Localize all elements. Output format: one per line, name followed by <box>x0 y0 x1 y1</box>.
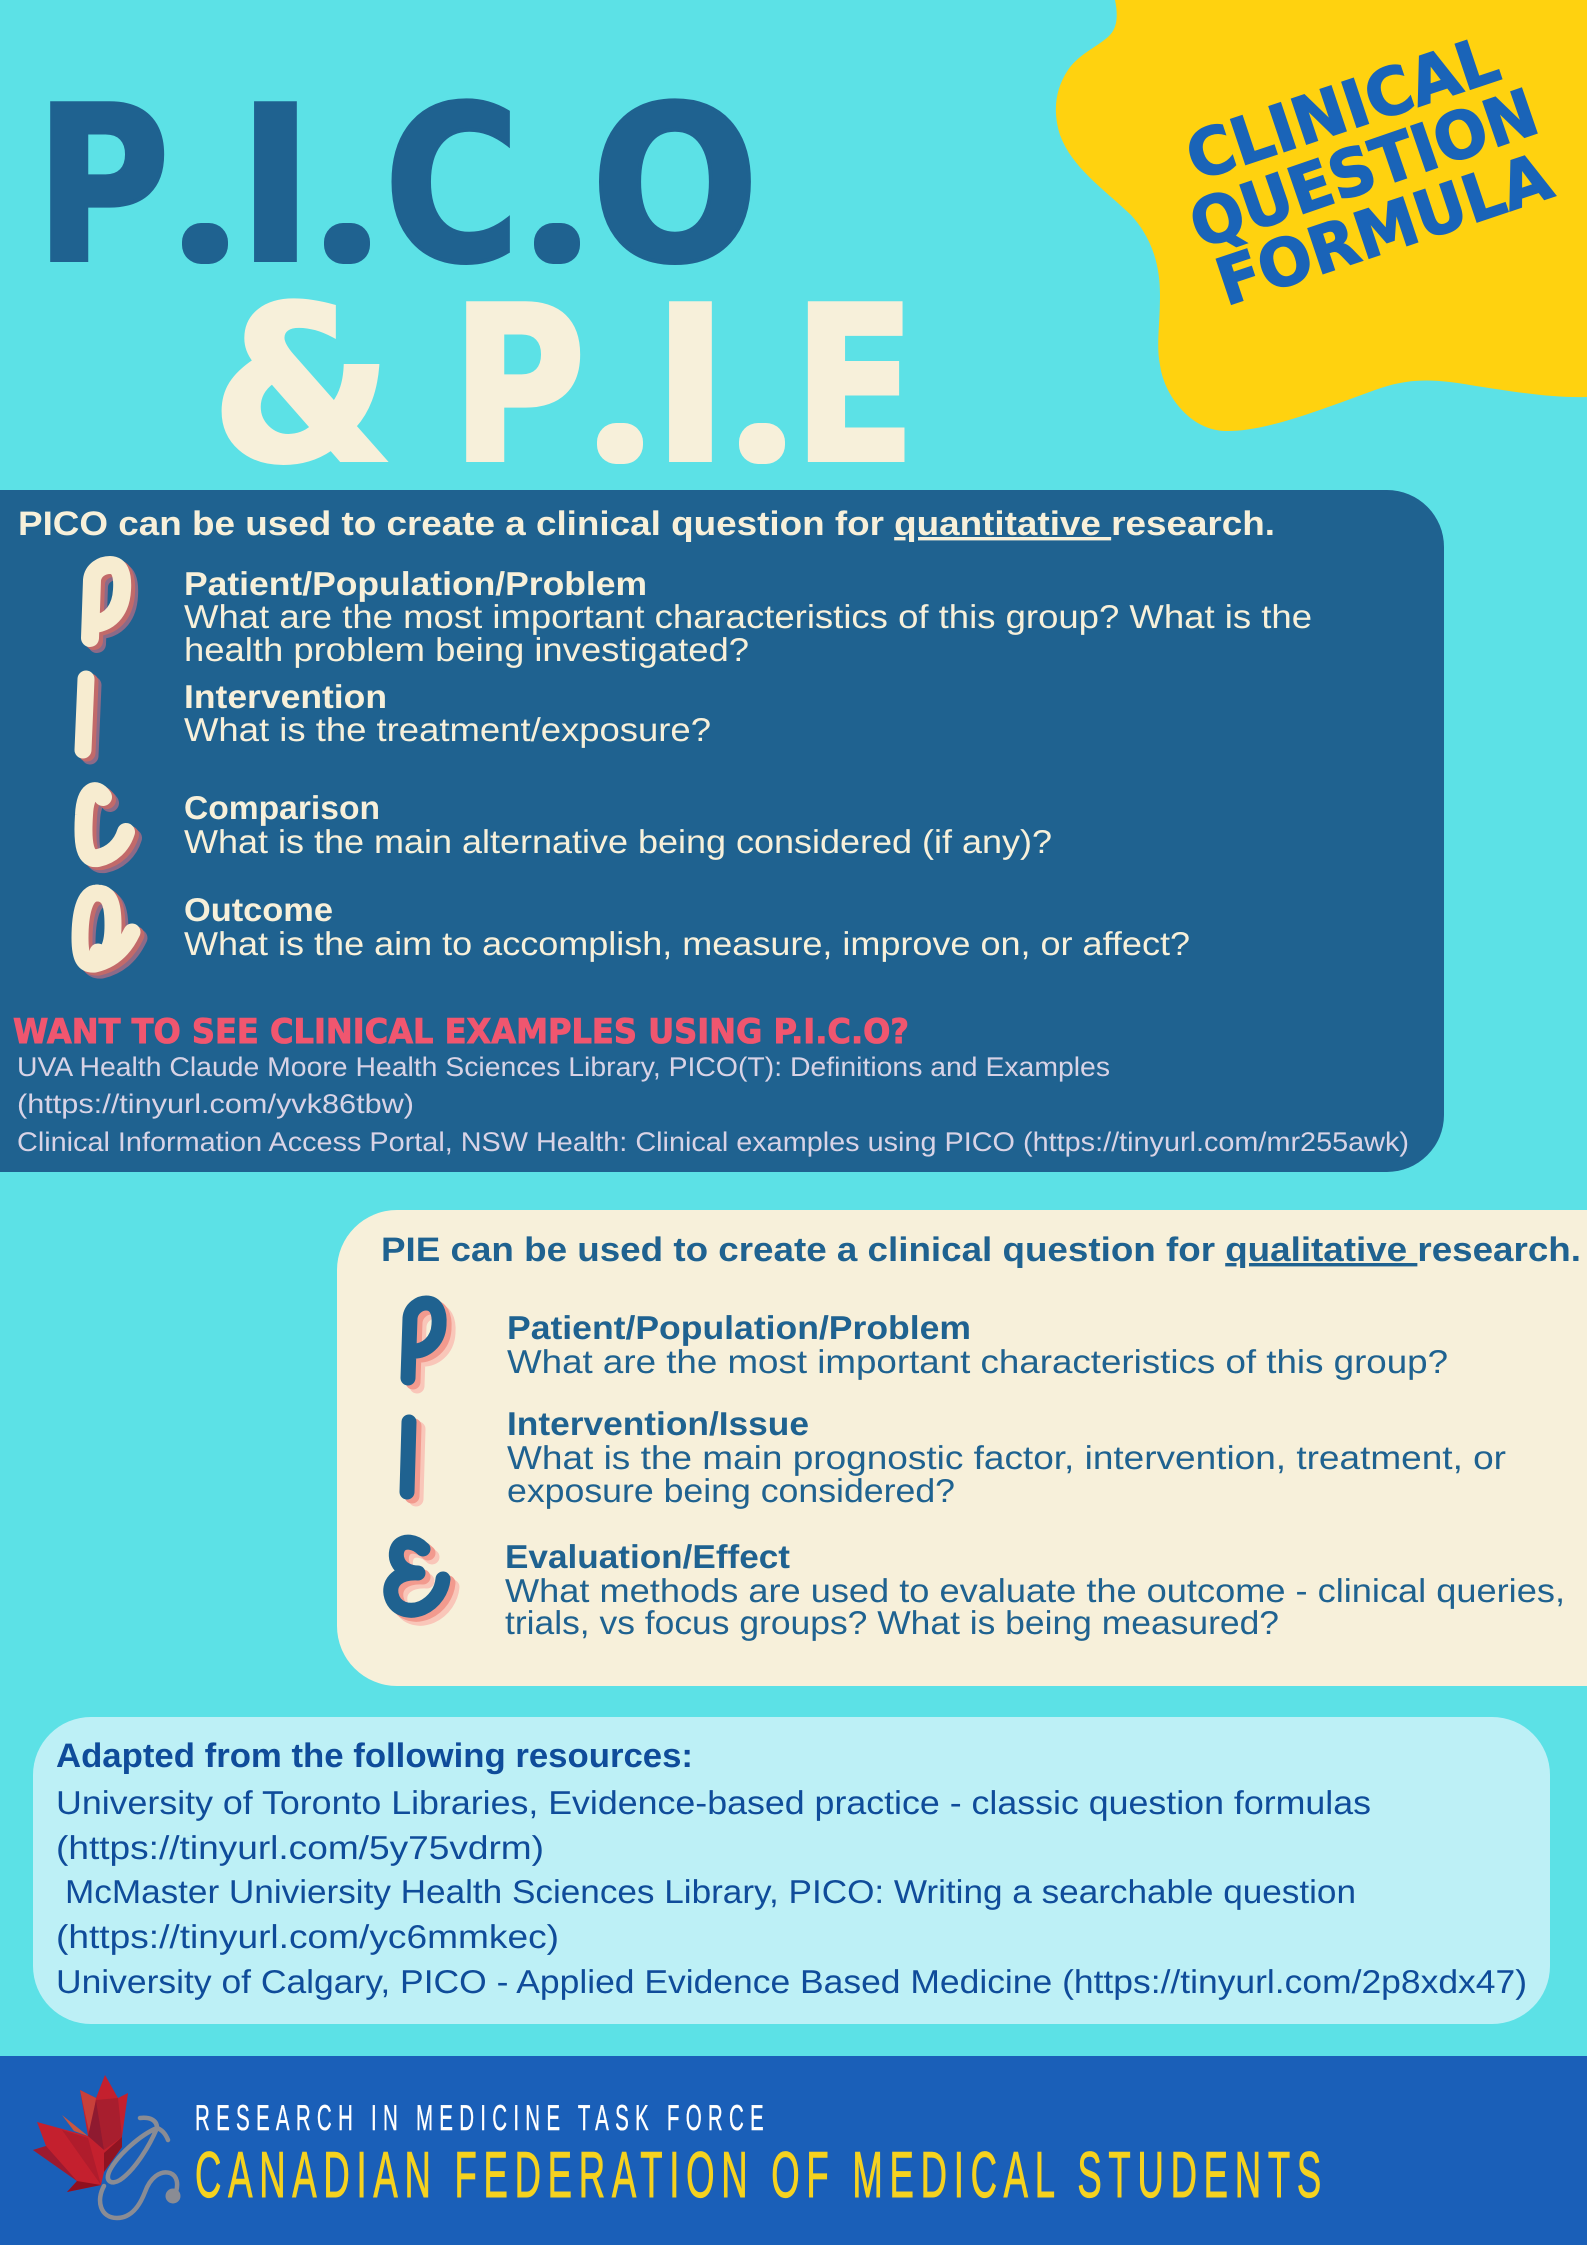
panel: resources <box>33 1717 1550 2024</box>
resources list: University of Calgary, PICO - Applied Evidence Based Medicine (https://tinyurl.com/2p8xdx47) <box>56 1963 1527 2000</box>
PICO panel background <box>0 490 1444 1172</box>
title: & P.I.E <box>211 260 916 511</box>
icon: stethoscope <box>100 2118 180 2218</box>
icon: letter O <box>80 893 139 970</box>
resources panel background <box>33 1717 1550 2024</box>
PIE heading: PIE can be used to create a clinical question for qualitative research. <box>381 1231 1581 1269</box>
title: P.I.C.O: C <box>384 60 520 311</box>
PIE item: intervention: Intervention/Issue <box>507 1405 809 1442</box>
title: P.I.C.O: P <box>35 60 170 311</box>
icon: letter C <box>83 791 133 864</box>
PIE panel background <box>337 1210 1587 1686</box>
title: & P.I.E: & <box>211 260 393 511</box>
resources list: (https://tinyurl.com/yc6mmkec) <box>56 1918 559 1955</box>
resources list: (https://tinyurl.com/5y75vdrm) <box>56 1829 544 1866</box>
icon: letter P <box>408 1303 448 1386</box>
badge text: CLINICAL <box>1177 22 1508 196</box>
title: P.I.C.O: I <box>237 60 314 311</box>
example links: UVA Health Claude Moore Health Sciences Library, PICO(T): Definitions and Examples <box>17 1052 1110 1082</box>
badge: clinical question formula <box>1056 0 1587 431</box>
PICO item: comparison: Comparison <box>184 789 380 826</box>
PIE item: intervention: exposure being considered? <box>507 1472 955 1509</box>
PICO item: intervention <box>184 678 711 748</box>
panel: PICO <box>0 490 1444 1172</box>
PIE item: evaluation: What methods are used to evaluate the outcome - clinical queries, <box>505 1572 1565 1609</box>
PICO item: patient: What are the most important characteristics of this group? What is the <box>184 598 1312 635</box>
badge text: QUESTION <box>1181 75 1547 264</box>
icon: letter P <box>90 565 129 644</box>
PICO heading: PICO can be used to create a clinical question for quantitative research. <box>18 505 1275 543</box>
PIE item: intervention <box>507 1405 1506 1509</box>
title: & P.I.E: P <box>451 260 586 511</box>
PICO item: comparison: What is the main alternative being considered (if any)? <box>184 823 1052 860</box>
PICO item: patient <box>184 565 1312 668</box>
icon: letter E <box>391 1542 452 1618</box>
resources list <box>56 1784 1527 2000</box>
title: P.I.C.O <box>35 60 759 311</box>
footer band <box>0 2056 1587 2245</box>
PIE item: patient: What are the most important characteristics of this group? <box>507 1343 1448 1380</box>
title: & P.I.E: E <box>793 260 916 511</box>
title: & P.I.E: I <box>652 260 729 511</box>
PICO item: outcome <box>184 891 1190 962</box>
PIE item: evaluation: trials, vs focus groups? What is being measured? <box>505 1604 1279 1641</box>
PICO item: intervention: What is the treatment/exposure? <box>184 711 711 748</box>
example links <box>17 1052 1409 1157</box>
example links: Clinical Information Access Portal, NSW Health: Clinical examples using PICO (https://tinyurl.com/mr255awk) <box>17 1127 1409 1157</box>
icon: letter I <box>407 1422 418 1499</box>
badge text: FORMULA <box>1207 140 1561 321</box>
callout heading: clinical examples: WANT TO SEE CLINICAL EXAMPLES USING P.I.C.O? <box>13 1012 909 1052</box>
badge text <box>1177 22 1561 321</box>
resources heading: Adapted from the following resources: <box>56 1737 693 1775</box>
yellow blob <box>1056 0 1587 431</box>
panel: PIE <box>337 1210 1587 1686</box>
PIE item: patient: Patient/Population/Problem <box>507 1309 971 1346</box>
PICO item: outcome: What is the aim to accomplish, measure, improve on, or affect? <box>184 925 1190 962</box>
PICO item: patient: Patient/Population/Problem <box>184 565 647 602</box>
PICO item: outcome: Outcome <box>184 891 333 928</box>
title: P.I.C.O: O <box>591 60 759 311</box>
example links: (https://tinyurl.com/yvk86tbw) <box>17 1089 414 1119</box>
footer background <box>0 2056 1587 2245</box>
footer task force line: RESEARCH IN MEDICINE TASK FORCE <box>195 2097 770 2138</box>
resources list: McMaster Univiersity Health Sciences Library, PICO: Writing a searchable question <box>65 1873 1356 1910</box>
PIE item: intervention: What is the main prognostic factor, intervention, treatment, or <box>507 1439 1506 1476</box>
resources list: University of Toronto Libraries, Evidence-based practice - classic question formulas <box>56 1784 1371 1821</box>
PIE item: evaluation <box>505 1538 1565 1641</box>
icon: maple leaf logo <box>33 2075 128 2192</box>
PICO item: intervention: Intervention <box>184 678 387 715</box>
PIE item: evaluation: Evaluation/Effect <box>505 1538 790 1575</box>
PICO item: patient: health problem being investigated? <box>184 631 749 668</box>
PIE item: patient <box>507 1309 1448 1380</box>
icon: letter I <box>83 679 93 756</box>
PICO item: comparison <box>184 789 1052 860</box>
